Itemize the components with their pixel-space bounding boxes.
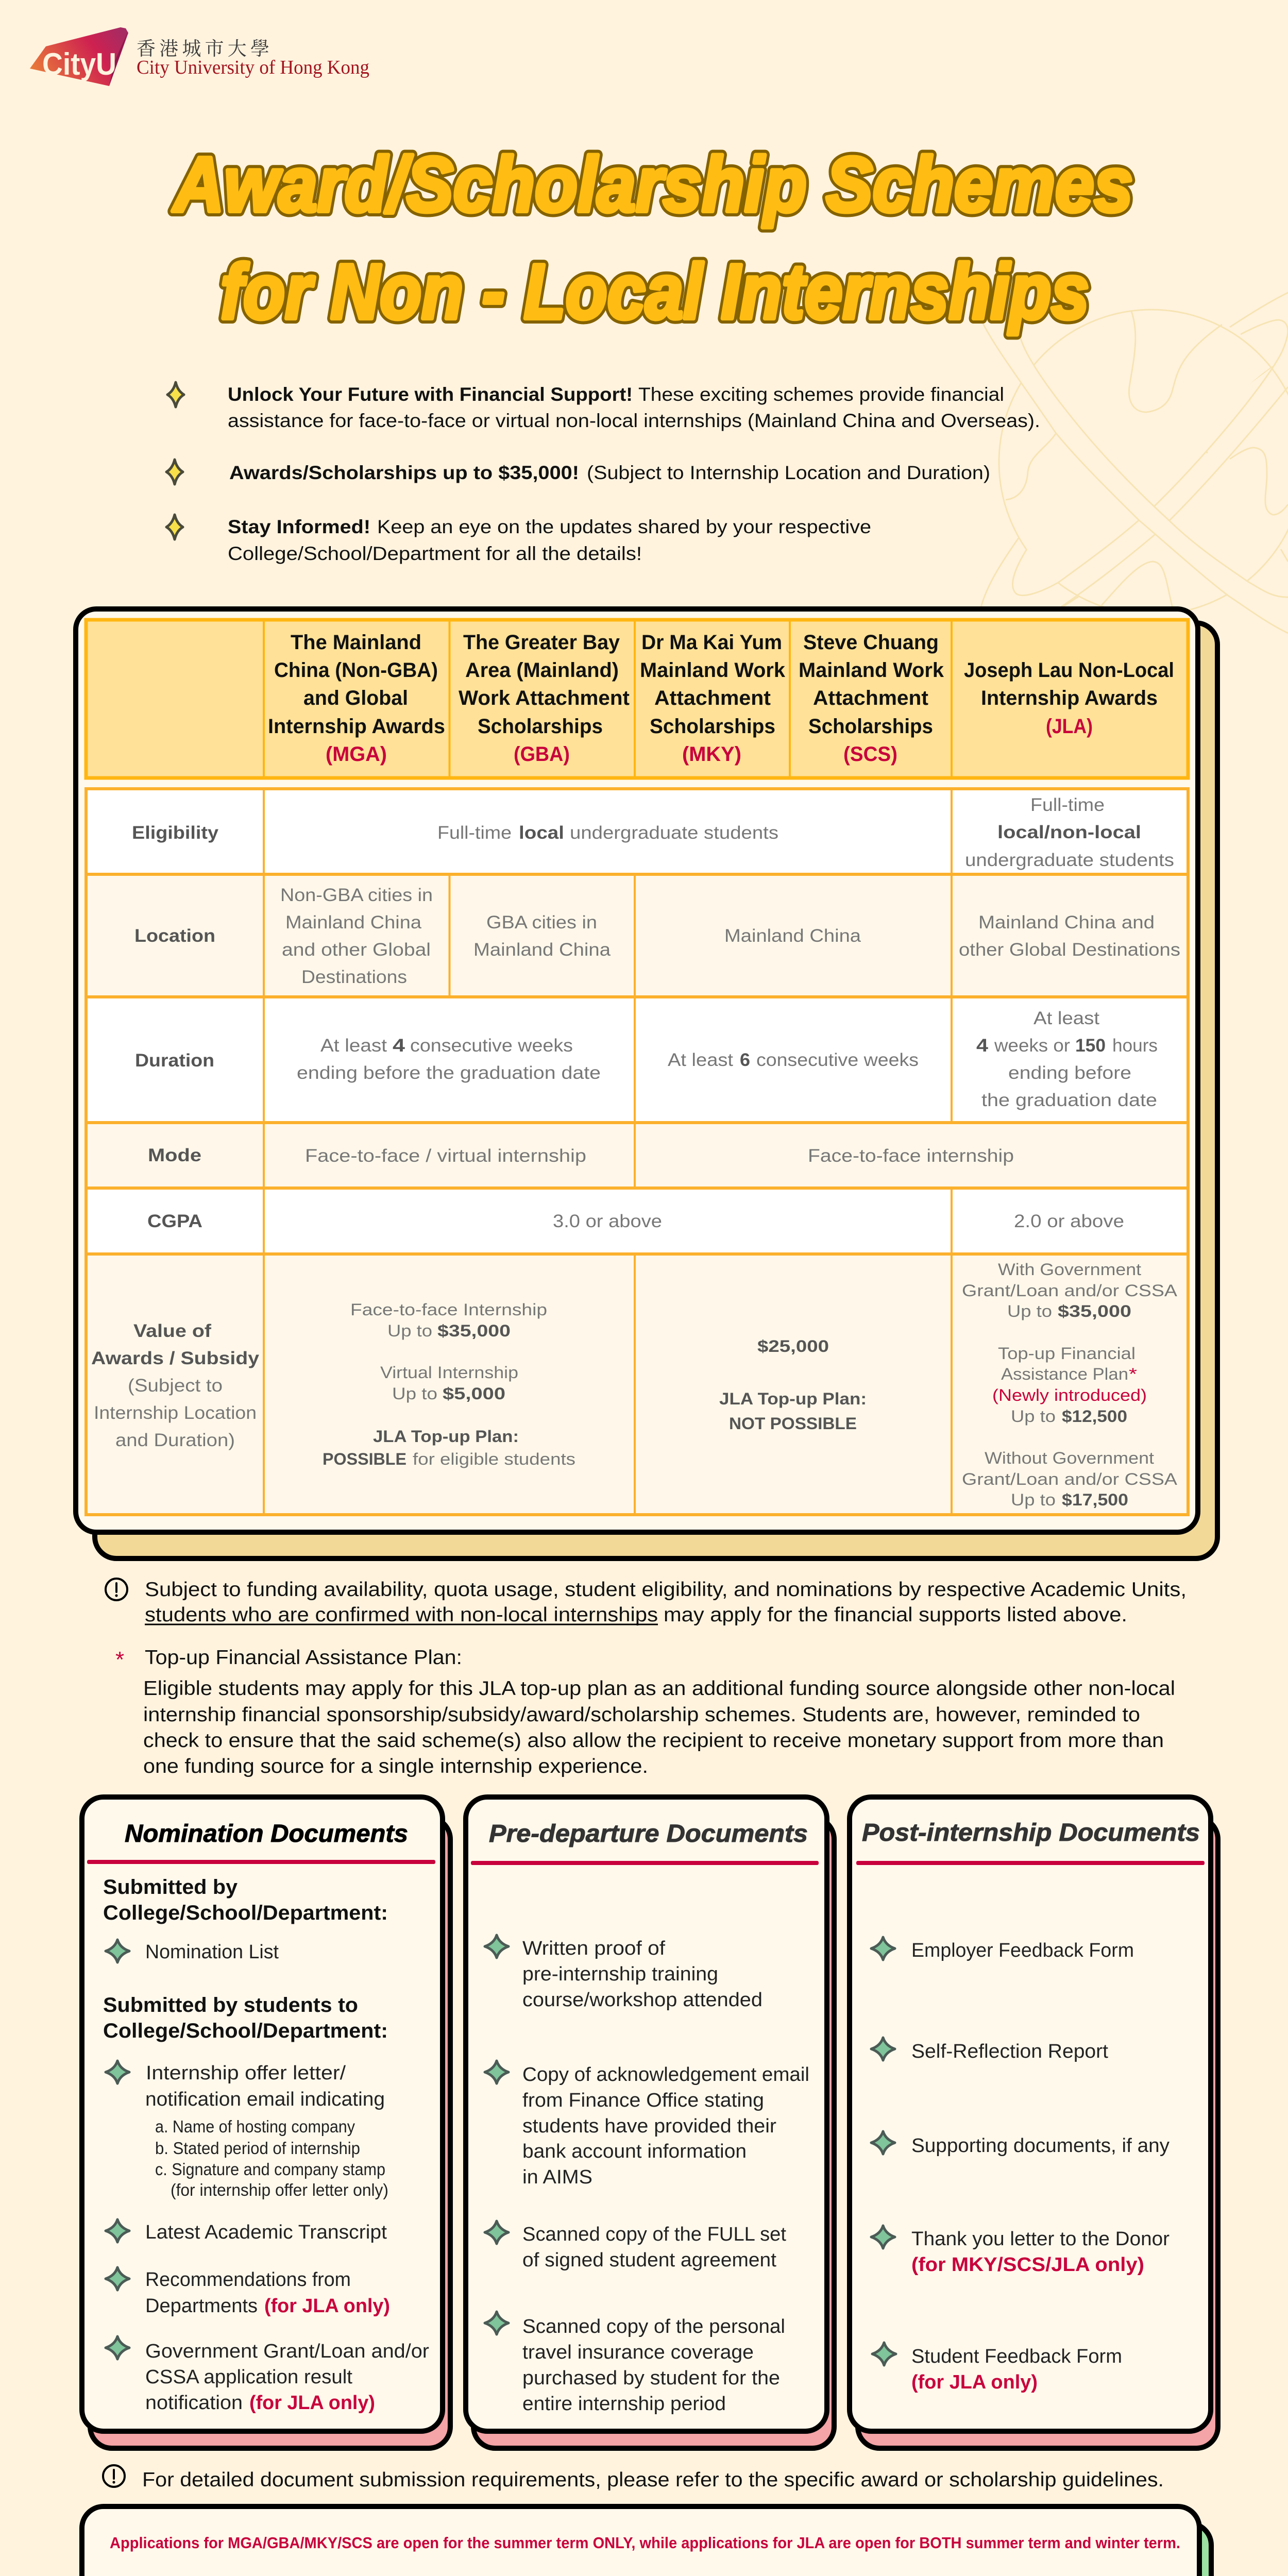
header: SCS [799,631,944,766]
row: value of awards: With Government [998,1260,1141,1279]
row: value of awards: Grant/Loan and/or CSSA [962,1470,1178,1488]
note: document requirements: For detailed document submission requirements, please refer to the specific award or scholarship guidelines. [142,2469,1164,2491]
row: duration: 4 [976,1036,989,1056]
header: SCS: Mainland Work [799,659,944,682]
bullet 1 text [228,384,1040,431]
row: duration: At least [668,1050,733,1070]
row: value of awards: Value of [133,1321,211,1341]
bullet 1 text: Unlock Your Future with Financial Support! [228,384,633,405]
title [172,141,1133,335]
row: location: Mainland China and [978,912,1155,933]
item: acknowledgement email [485,2061,809,2188]
header: SCS: Attachment [813,687,928,709]
item: travel insurance: travel insurance coverage [522,2342,754,2363]
row: mode: Mode [148,1145,201,1165]
row: duration: 6 [740,1050,750,1070]
item: travel insurance: entire internship period [522,2393,726,2415]
row: duration: ending before [1008,1063,1131,1083]
note: top-up plan: * [115,1647,124,1672]
item: acknowledgement email: in AIMS [522,2166,592,2188]
row: value of awards: Top-up Financial [998,1344,1136,1363]
row: duration: the graduation date [981,1090,1157,1110]
row: duration: ending before the graduation date [297,1063,601,1083]
row: eligibility: local [519,823,564,843]
row: eligibility: Full-time [1030,795,1105,815]
row: location [134,885,1180,987]
row: location: Mainland China [285,912,422,933]
row: value of awards: $35,000 [437,1321,511,1340]
header: SCS: Steve Chuang [803,631,939,654]
row: duration: 4 [393,1036,405,1056]
note: top-up plan: internship financial sponsorship/subsidy/award/scholarship schemes. Students are, however, reminded to [143,1704,1140,1726]
submitted by students: c. Signature and company stamp [155,2160,385,2179]
row: location: Mainland China [724,926,861,946]
item: written proof [485,1935,762,2011]
item: travel insurance: purchased by student for the [522,2367,780,2389]
heading: Pre-departure Documents [489,1820,808,1848]
title: for Non - Local Internships [221,248,1089,335]
row: value of awards: Grant/Loan and/or CSSA [962,1281,1178,1300]
note: top-up plan: Top-up Financial Assistance Plan: [145,1647,462,1669]
item: travel insurance [485,2312,785,2415]
header: GBA: Scholarships [478,715,603,738]
item: acknowledgement email: Copy of acknowledgement email [522,2064,809,2086]
row: location: other Global Destinations [959,940,1180,960]
row: eligibility: local/non-local [997,822,1141,842]
row: duration: At least [1033,1008,1099,1028]
header: MGA [268,631,445,766]
row: value of awards: $5,000 [443,1384,505,1403]
item: thank you letter: Thank you letter to the Donor [911,2228,1170,2250]
submitted by students: Latest Academic Transcript [145,2222,387,2243]
submitted by students: (for internship offer letter only) [171,2180,388,2199]
heading: Nomination Documents [125,1820,408,1848]
item: acknowledgement email: from Finance Office stating [522,2090,764,2111]
heading: Post-internship Documents [862,1819,1200,1846]
table header [86,620,1188,778]
header: MKY: Dr Ma Kai Yum [641,631,782,654]
item: written proof: Written proof of [522,1938,665,1959]
row: value of awards: Up to [392,1384,437,1403]
icon: notice 1 [106,1579,127,1600]
row: CGPA: 3.0 or above [553,1211,662,1231]
row: location: Mainland China [473,940,611,960]
row: duration [135,1008,1158,1110]
row: value of awards: Face-to-face Internship [350,1300,547,1319]
panel: pre-departure documents [466,1797,834,2448]
row: mode: Face-to-face / virtual internship [305,1146,586,1166]
header: JLA: Internship Awards [981,687,1158,709]
item: student agreement: Scanned copy of the FULL set [522,2224,786,2245]
icon: bullet star 3 [166,515,183,539]
note: top-up plan [115,1647,1175,1777]
header: MGA: Internship Awards [268,715,445,738]
row: value of awards: JLA Top-up Plan: [719,1389,867,1408]
row: value of awards: Assistance Plan [1001,1365,1128,1383]
item: self-reflection: Self-Reflection Report [911,2041,1108,2062]
submitted by students: College/School/Department: [103,2020,388,2042]
icon: bullet star 1 [167,382,184,407]
logo wordmark: City University of Hong Kong [137,57,369,78]
item: thank you letter [871,2226,1170,2276]
title: Award/Scholarship Schemes [172,141,1133,228]
icon: bullet star 2 [166,460,183,484]
header: JLA: (JLA) [1046,715,1093,738]
header: GBA: (GBA) [514,743,570,766]
row: location: Destinations [301,967,407,987]
submitted by college: Nomination List [145,1941,279,1963]
item: written proof: pre-internship training [522,1963,718,1985]
row: value of awards: (Newly introduced) [992,1386,1147,1404]
bullet 3 text: Keep an eye on the updates shared by your respective [377,516,871,537]
panel: post-internship documents [850,1797,1218,2448]
panel: timeline [82,2506,1211,2576]
header: GBA: Work Attachment [459,687,630,709]
row: value of awards: and Duration) [115,1430,235,1450]
header: MKY: Mainland Work [640,659,786,682]
header: GBA: Area (Mainland) [465,659,619,682]
header: MKY: Scholarships [650,715,775,738]
submitted by students: b. Stated period of internship [155,2139,360,2158]
row: mode: Face-to-face internship [808,1146,1014,1166]
submitted by college: College/School/Department: [103,1902,388,1924]
submitted by college [103,1876,388,1963]
row: value of awards: (Subject to [128,1376,223,1396]
header: MGA: (MGA) [326,743,387,766]
bullet 2 text [229,462,990,483]
panel: nomination documents [82,1797,450,2448]
row: value of awards [91,1260,1178,1509]
row: duration: consecutive weeks [756,1050,919,1070]
submitted by students: Internship offer letter/ [146,2062,346,2084]
header: GBA: The Greater Bay [463,631,620,654]
row: CGPA [147,1211,1124,1231]
row: duration: At least [320,1036,387,1056]
logo mark [30,27,128,86]
row: eligibility [132,795,1174,870]
note: top-up plan: one funding source for a single internship experience. [143,1755,648,1777]
row: value of awards: Up to [1007,1302,1052,1320]
header: SCS: Scholarships [808,715,933,738]
header: MKY: Attachment [654,687,771,709]
item: supporting documents: Supporting documents, if any [911,2135,1170,2157]
logo wordmark [137,33,369,78]
item: student agreement: of signed student agreement [522,2249,776,2271]
logo wordmark: 香港城市大學 [137,33,269,61]
timeline notice: Applications for MGA/GBA/MKY/SCS are open for the summer term ONLY, while applications for JLA are open for BOTH summer term and winter term. [110,2534,1180,2552]
row: location: Non-GBA cities in [280,885,433,905]
header: SCS: (SCS) [843,743,897,766]
note: top-up plan: check to ensure that the said scheme(s) also allow the recipient to receive monetary support from more than [143,1730,1164,1752]
row: value of awards: $12,500 [1062,1407,1127,1426]
header: MGA: China (Non-GBA) [274,659,438,682]
item: employer feedback: Employer Feedback Form [911,1940,1134,1961]
row: duration: hours [1112,1036,1158,1056]
bullet 3 text: Stay Informed! [228,516,370,537]
row: duration: Duration [135,1050,214,1071]
header: JLA: Joseph Lau Non-Local [964,659,1174,682]
submitted by students: Recommendations from [145,2269,351,2291]
bullet 3 text [228,516,871,564]
row: value of awards: $17,500 [1062,1490,1128,1509]
row: duration: 150 [1075,1036,1106,1056]
bullet 2 text: (Subject to Internship Location and Duration) [587,462,990,483]
row: mode [148,1145,1014,1166]
note: funding availability [106,1579,1187,1626]
table body [86,789,1188,1515]
submitted by students: Departments [145,2295,258,2317]
row: eligibility: Eligibility [132,823,219,843]
row: location: Location [134,926,215,946]
row: value of awards: Up to [1011,1490,1056,1509]
header: MGA: and Global [303,687,408,709]
row: value of awards: Up to [387,1321,432,1340]
bullet 1 text: These exciting schemes provide financial [638,384,1004,405]
item: travel insurance: Scanned copy of the personal [522,2316,785,2337]
item: student feedback [872,2343,1122,2393]
row: value of awards: Up to [1011,1407,1056,1426]
submitted by students: notification [145,2392,243,2414]
row: value of awards: NOT POSSIBLE [729,1414,857,1433]
row: value of awards: POSSIBLE [323,1450,406,1468]
logo mark: CityU [42,47,116,81]
note text: may apply for the financial supports listed above. [664,1604,1127,1626]
bullet 3 text: College/School/Department for all the details! [228,543,642,564]
submitted by students: Government Grant/Loan and/or [145,2341,429,2362]
item: acknowledgement email: bank account information [522,2141,747,2162]
row: eligibility: undergraduate students [570,823,778,843]
item: student feedback: Student Feedback Form [911,2346,1122,2367]
submitted by students [103,1994,429,2414]
row: value of awards: for eligible students [413,1450,575,1468]
row: location: GBA cities in [486,912,597,933]
row: value of awards: Virtual Internship [380,1363,518,1382]
header: GBA [459,631,630,766]
row: eligibility: Full-time [437,823,512,843]
logo: CityU [30,27,369,86]
row: duration: consecutive weeks [410,1036,573,1056]
row: location: and other Global [282,940,431,960]
row: CGPA: CGPA [147,1211,202,1231]
note: top-up plan: Eligible students may apply for this JLA top-up plan as an additional funding source alongside other non-local [143,1677,1175,1700]
header: MGA: The Mainland [291,631,421,654]
note text: students who are confirmed with non-local internships [145,1604,658,1626]
bullet 1 text: assistance for face-to-face or virtual non-local internships (Mainland China and Overseas). [228,410,1040,431]
submitted by students: notification email indicating [145,2089,385,2110]
submitted by students: CSSA application result [145,2366,352,2388]
submitted by college: Submitted by [103,1876,238,1899]
submitted by students: Submitted by students to [103,1994,358,2016]
note text [145,1579,1187,1626]
item: student feedback: (for JLA only) [911,2371,1038,2393]
item: student agreement [485,2221,786,2271]
row: value of awards: JLA Top-up Plan: [373,1427,519,1446]
row: value of awards: $35,000 [1058,1302,1131,1320]
header: MKY: (MKY) [682,743,741,766]
row: CGPA: 2.0 or above [1014,1211,1124,1231]
header: MKY [640,631,786,766]
row: value of awards: $25,000 [757,1337,829,1355]
row: value of awards: Awards / Subsidy [91,1348,260,1368]
row: value of awards: Internship Location [94,1403,257,1423]
panel: comparison table [76,609,1218,2576]
item: thank you letter: (for MKY/SCS/JLA only) [911,2254,1144,2276]
row: eligibility: undergraduate students [965,850,1174,870]
row: value of awards: * [1129,1365,1137,1383]
bullet 2 text: Awards/Scholarships up to $35,000! [229,462,579,483]
intro bullets [166,382,1040,564]
row: duration: weeks or [994,1036,1070,1056]
row: value of awards: Without Government [985,1449,1154,1467]
note text: Subject to funding availability, quota usage, student eligibility, and nominations by respective Academic Units, [145,1579,1187,1601]
item: acknowledgement email: students have provided their [522,2115,776,2137]
header: JLA [964,659,1174,738]
submitted by students: (for JLA only) [249,2392,375,2414]
submitted by students: (for JLA only) [264,2295,390,2317]
item: written proof: course/workshop attended [522,1989,762,2011]
watermark: globe outline [979,293,1288,633]
submitted by students: a. Name of hosting company [155,2117,355,2136]
